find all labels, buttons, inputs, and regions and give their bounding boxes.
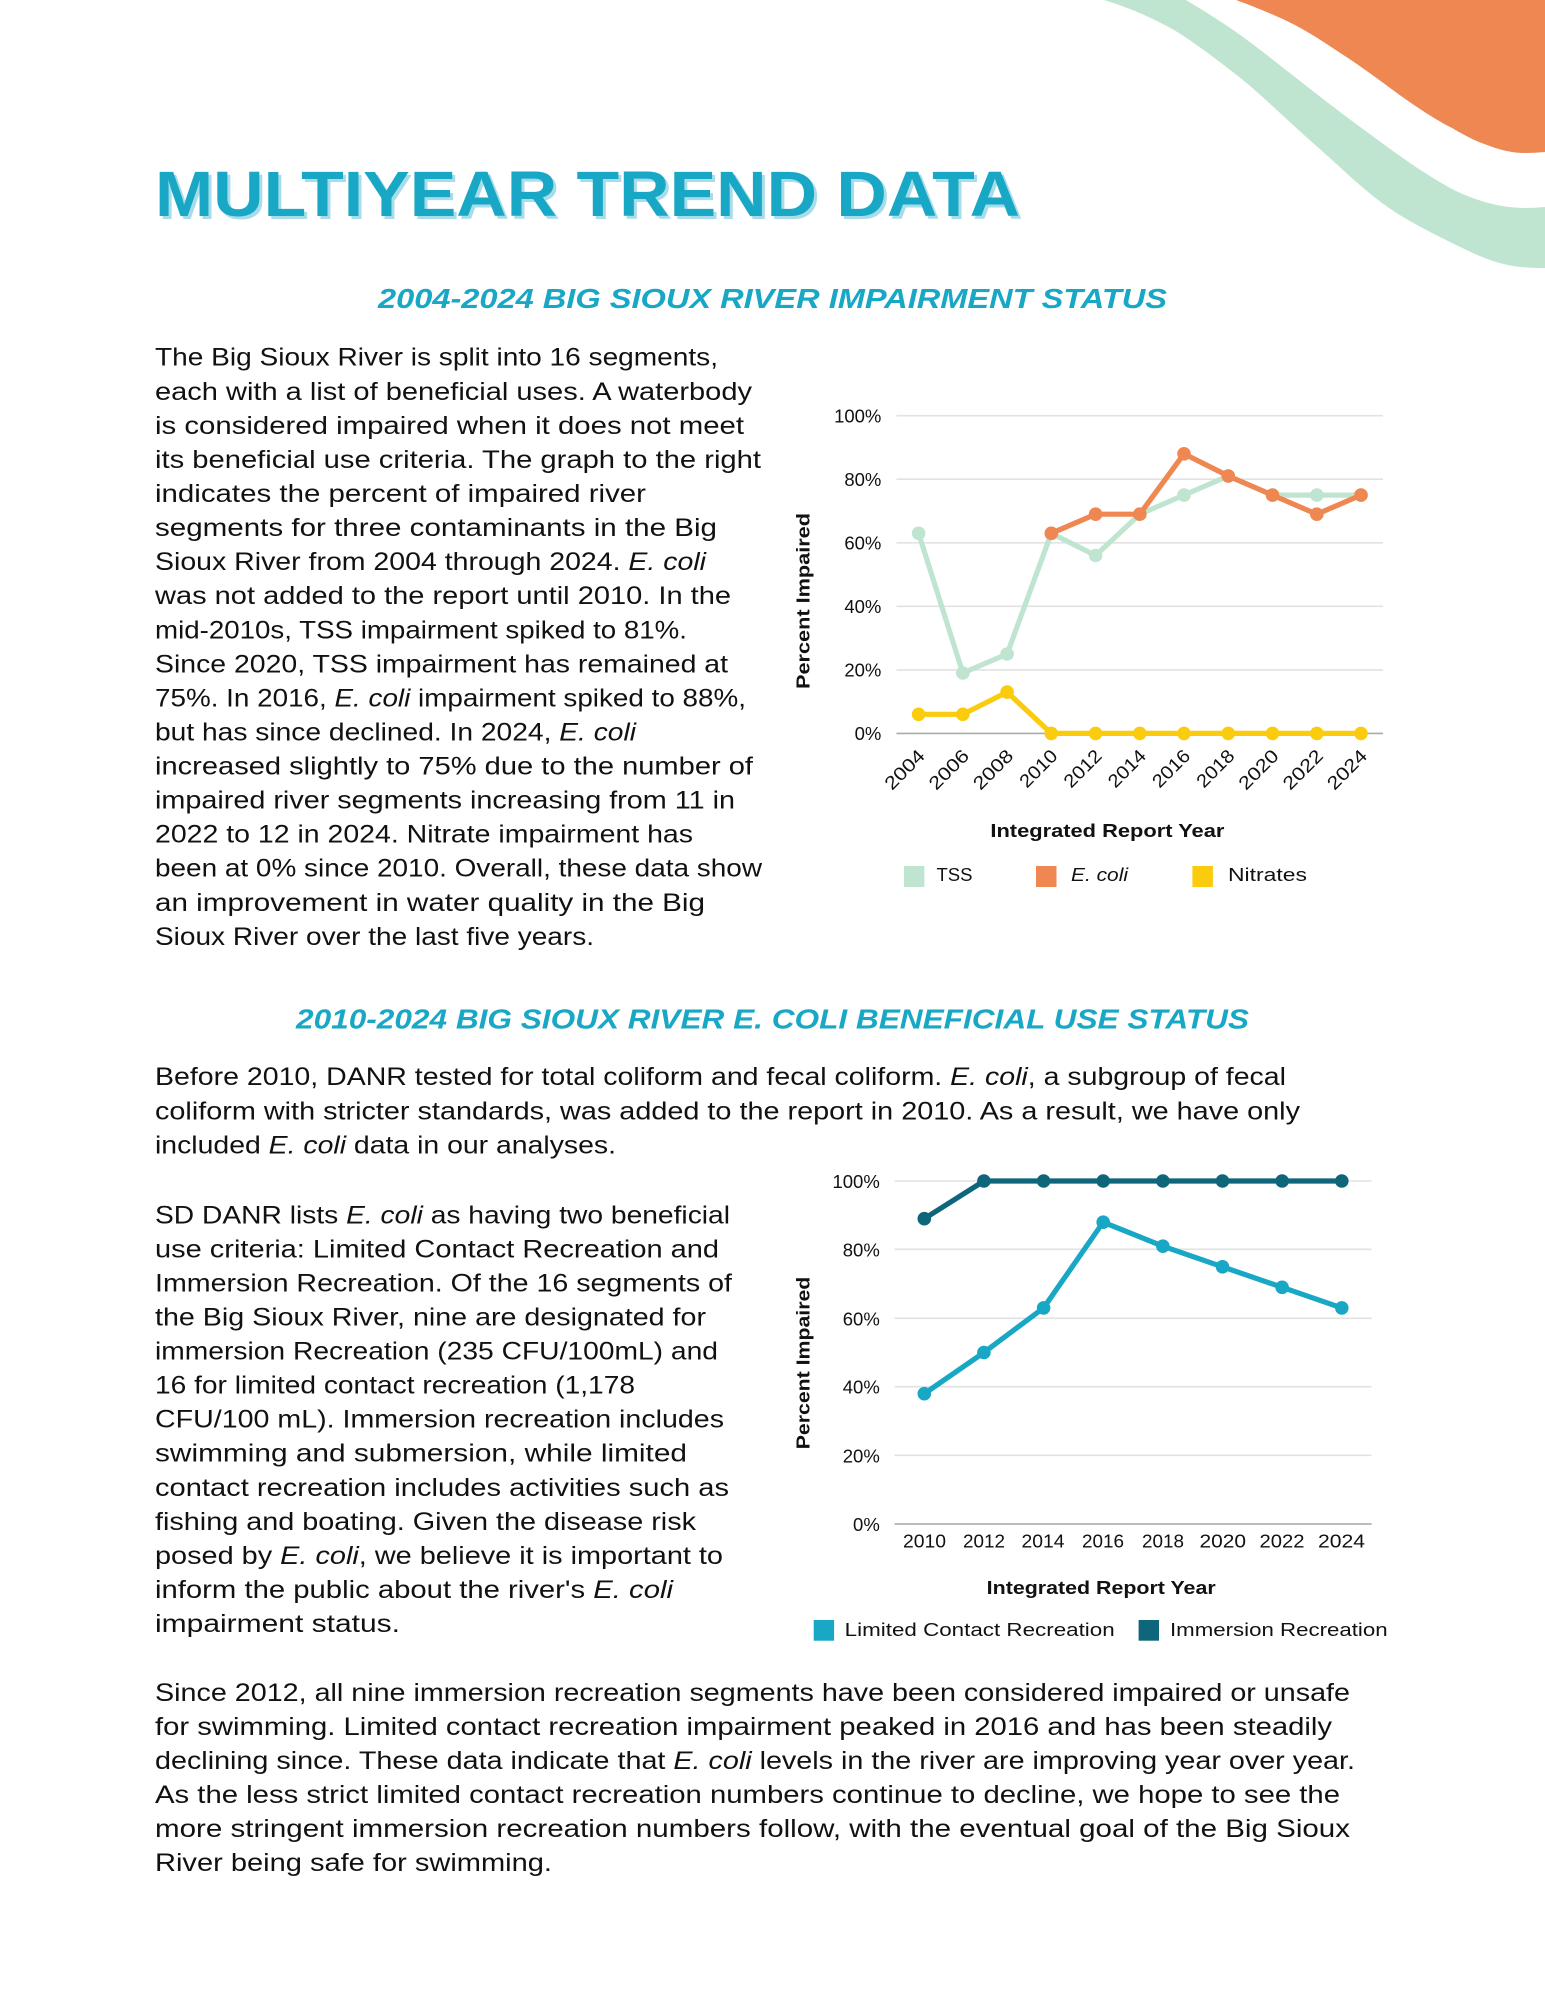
x axis title: Integrated Report Year — [987, 1577, 1216, 1598]
x axis year labels: 2012 — [963, 1530, 1005, 1552]
text block: impairment status description: increased slightly to 75% due to the number of — [155, 754, 753, 780]
text block: impairment status description: segments for three contaminants in the Big — [155, 515, 717, 542]
y axis labels: 40% — [844, 596, 881, 617]
text block: beneficial use criteria — [155, 1202, 732, 1638]
text block: conclusion: declining since. These data indicate that E. coli levels in the river are improving year over year. — [155, 1748, 1355, 1775]
x axis year labels: 2016 — [1082, 1530, 1124, 1552]
text block: E. coli introduction: coliform with stricter standards, was added to the report in 2010. As a result, we have only — [155, 1098, 1301, 1125]
decorative orange wave — [1236, 0, 1545, 153]
x axis year labels: 2010 — [903, 1530, 946, 1552]
text block: beneficial use criteria: inform the public about the river's E. coli — [155, 1577, 675, 1604]
text block: impairment status description: an improvement in water quality in the Big — [155, 890, 705, 917]
text block: conclusion: As the less strict limited contact recreation numbers continue to decline, we hope to see the — [155, 1782, 1340, 1809]
text block: beneficial use criteria: impairment status. — [155, 1611, 400, 1638]
x axis year labels: 2016 — [1148, 745, 1194, 792]
y axis labels: 60% — [844, 532, 881, 553]
line chart: impairment status 2004-2024 — [792, 405, 1383, 887]
heading: impairment status: 2004-2024 BIG SIOUX RIVER IMPAIRMENT STATUS — [377, 283, 1167, 314]
text block: impairment status description: mid-2010s, TSS impairment spiked to 81%. — [155, 617, 687, 644]
text block: beneficial use criteria: contact recreation includes activities such as — [155, 1475, 729, 1502]
text block: beneficial use criteria: CFU/100 mL). Immersion recreation includes — [155, 1407, 724, 1434]
text block: conclusion: Since 2012, all nine immersion recreation segments have been considered impaired or unsafe — [155, 1680, 1350, 1707]
line chart: E. coli beneficial use 2010-2024 — [792, 1171, 1388, 1641]
legend — [904, 864, 1307, 887]
x axis year labels: 2022 — [1260, 1530, 1304, 1552]
text block: impairment status description — [154, 345, 762, 951]
y axis title: Percent Impaired — [792, 1277, 814, 1449]
series: Immersion Recreation — [918, 1174, 1349, 1225]
text block: beneficial use criteria: posed by E. coli , we believe it is important to — [155, 1543, 723, 1570]
x axis year labels: 2020 — [1200, 1530, 1246, 1552]
y axis labels: 80% — [843, 1239, 880, 1260]
x axis year labels: 2020 — [1234, 745, 1283, 794]
y axis title: Percent Impaired — [792, 513, 814, 689]
y axis labels: 40% — [843, 1377, 880, 1398]
legend: Immersion Recreation — [1170, 1619, 1388, 1640]
text block: impairment status description: been at 0% since 2010. Overall, these data show — [155, 856, 762, 883]
series: TSS — [912, 469, 1368, 680]
text block: conclusion: River being safe for swimming. — [155, 1850, 552, 1877]
y axis labels — [834, 405, 881, 744]
text block: impairment status description: The Big Sioux River is split into 16 segments, — [155, 345, 718, 372]
text block: impairment status description: indicates the percent of impaired river — [155, 481, 646, 508]
x axis year labels: 2014 — [1103, 745, 1150, 792]
y axis labels: 80% — [844, 469, 881, 490]
x axis year labels — [880, 745, 1371, 794]
text block: impairment status description: Since 2020, TSS impairment has remained at — [155, 651, 728, 678]
text block: beneficial use criteria: SD DANR lists E. coli as having two beneficial — [155, 1202, 730, 1229]
y axis labels: 100% — [832, 1171, 880, 1192]
x axis year labels: 2012 — [1059, 745, 1106, 792]
x axis year labels: 2018 — [1142, 1530, 1184, 1552]
text block: impairment status description: is considered impaired when it does not meet — [155, 413, 744, 440]
x axis year labels: 2010 — [1015, 745, 1062, 792]
x axis year labels: 2024 — [1318, 1530, 1365, 1552]
x axis year labels: 2022 — [1278, 745, 1327, 794]
y axis labels: 100% — [834, 405, 881, 426]
text block: impairment status description: its beneficial use criteria. The graph to the right — [155, 447, 761, 474]
y axis labels: 20% — [844, 660, 881, 680]
text block: impairment status description: impaired river segments increasing from 11 in — [155, 788, 735, 815]
text block: impairment status description: 2022 to 12 in 2024. Nitrate impairment has — [155, 822, 693, 849]
series: Nitrates — [912, 685, 1368, 740]
text block: impairment status description: 75%. In 2016, E. coli impairment spiked to 88%, — [155, 685, 746, 712]
text block: E. coli introduction: included E. coli data in our analyses. — [155, 1132, 616, 1159]
text block: impairment status description: was not added to the report until 2010. In the — [154, 583, 731, 610]
text block: impairment status description: Sioux River over the last five years. — [155, 924, 594, 951]
y axis labels: 0% — [855, 723, 881, 744]
legend: Nitrates — [1228, 864, 1307, 885]
x axis year labels — [903, 1530, 1365, 1552]
series: Limited Contact Recreation — [918, 1215, 1349, 1400]
text block: beneficial use criteria: 16 for limited contact recreation (1,178 — [155, 1373, 635, 1400]
heading: beneficial use status: 2010-2024 BIG SIOUX RIVER E. COLI BENEFICIAL USE STATUS — [295, 1004, 1249, 1034]
x axis year labels: 2018 — [1192, 745, 1239, 792]
text block: conclusion: for swimming. Limited contact recreation impairment peaked in 2016 and has been steadily — [155, 1714, 1333, 1741]
x axis title: Integrated Report Year — [990, 820, 1224, 841]
text block: impairment status description: each with a list of beneficial uses. A waterbody — [155, 379, 753, 406]
x axis year labels: 2024 — [1322, 745, 1371, 794]
text block: beneficial use criteria: swimming and submersion, while limited — [155, 1441, 687, 1468]
y axis labels: 60% — [843, 1308, 880, 1329]
x axis year labels: 2008 — [969, 745, 1017, 794]
legend: TSS — [936, 864, 972, 885]
legend — [814, 1619, 1388, 1641]
x axis year labels: 2014 — [1022, 1530, 1064, 1552]
text block: conclusion — [155, 1680, 1355, 1877]
x axis year labels: 2004 — [880, 745, 929, 794]
text block: beneficial use criteria: the Big Sioux River, nine are designated for — [155, 1304, 706, 1332]
text block: conclusion: more stringent immersion recreation numbers follow, with the eventual goal of the Big Sioux — [155, 1816, 1351, 1843]
y axis labels — [832, 1171, 880, 1535]
text block: beneficial use criteria: use criteria: Limited Contact Recreation and — [155, 1236, 719, 1263]
text block: beneficial use criteria: immersion Recreation (235 CFU/100mL) and — [155, 1338, 718, 1366]
text block: impairment status description: Sioux River from 2004 through 2024. E. coli — [155, 549, 708, 576]
decorative mint wave — [1104, 0, 1545, 268]
y axis labels: 0% — [853, 1514, 880, 1535]
text block: impairment status description: but has since declined. In 2024, E. coli — [155, 720, 638, 746]
title: MULTIYEAR TREND DATA — [155, 158, 1020, 230]
legend: Limited Contact Recreation — [845, 1619, 1115, 1640]
x axis year labels: 2006 — [924, 745, 973, 794]
text block: E. coli introduction: Before 2010, DANR tested for total coliform and fecal coliform. E. coli , a subgroup of fecal — [155, 1064, 1286, 1091]
text block: E. coli introduction — [155, 1064, 1301, 1159]
text block: beneficial use criteria: Immersion Recreation. Of the 16 segments of — [155, 1270, 732, 1297]
legend: E. coli — [1071, 864, 1129, 885]
series: E. coli — [1044, 447, 1368, 540]
text block: beneficial use criteria: fishing and boating. Given the disease risk — [155, 1509, 697, 1536]
y axis labels: 20% — [843, 1445, 880, 1466]
